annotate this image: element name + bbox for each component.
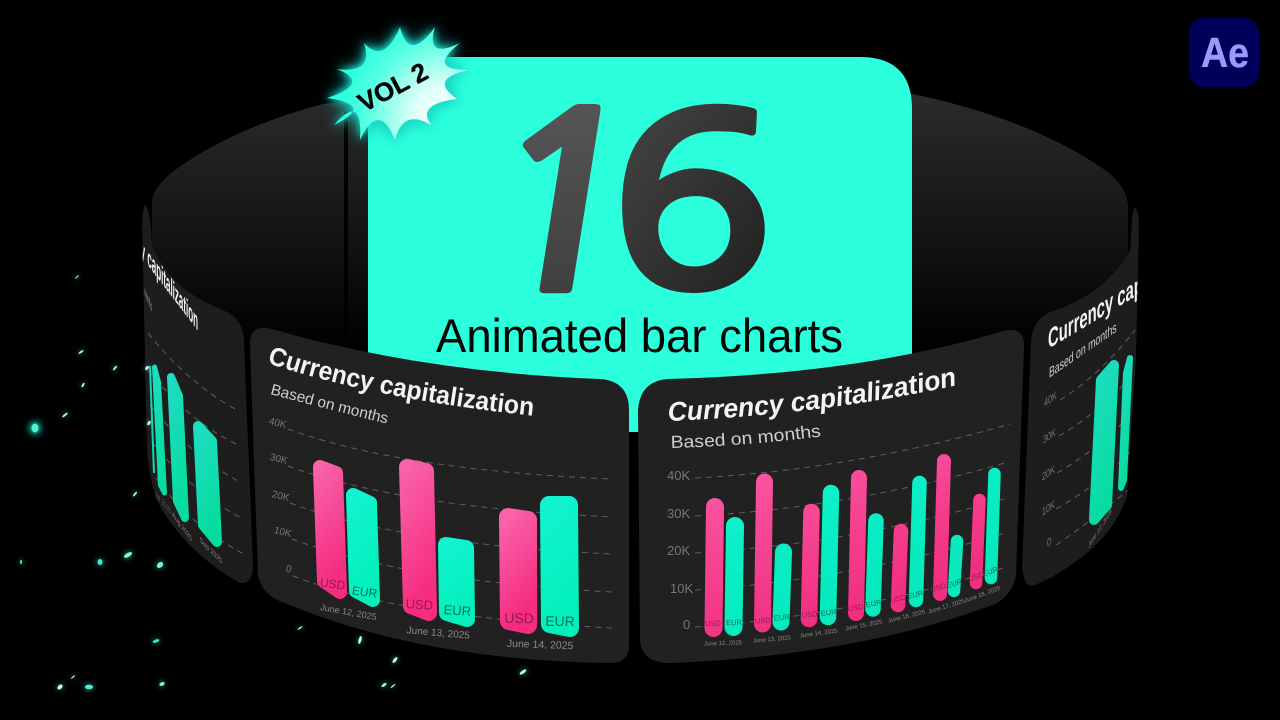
bars: June 14: USD xyxy=(504,610,534,626)
bar labels: EUR xyxy=(865,598,883,609)
date labels xyxy=(704,586,1002,648)
panel: far left chart: Jul 2025 xyxy=(155,488,171,517)
date labels: June 14, 2025 xyxy=(800,628,839,640)
bar labels: USD xyxy=(847,602,865,613)
panel: far right chart: Currency capitalization xyxy=(1048,226,1211,355)
gap between back panels xyxy=(344,112,348,332)
y axis labels: 20K xyxy=(271,489,291,504)
y axis labels: 30K xyxy=(269,452,289,467)
panel: far right chart: 30K xyxy=(1043,426,1056,447)
panel: far right chart: 20K xyxy=(1042,463,1055,484)
bars: June 14: June 14, 2025 xyxy=(507,638,574,652)
panel: far right chart: June 12, 2025 xyxy=(1089,506,1111,551)
card background xyxy=(638,330,1024,663)
panel: far left chart: Currency capitalization xyxy=(110,194,198,337)
date labels: June 12, 2025 xyxy=(704,640,743,648)
y axis labels: 0 xyxy=(683,617,690,632)
bar labels: USD xyxy=(967,570,986,583)
bar labels: USD xyxy=(929,581,948,594)
panel: chart with seven date groups xyxy=(638,330,1024,663)
big number 16: 6 xyxy=(606,88,777,326)
bars: June 12: EUR xyxy=(351,583,378,601)
panel: far right chart: Based on months xyxy=(1049,319,1117,381)
date labels: June 16, 2025 xyxy=(888,609,927,625)
y axis labels: 0 xyxy=(285,564,293,576)
bars: June 13: EUR xyxy=(443,602,472,619)
bars: June 13: June 13, 2025 xyxy=(406,625,471,642)
panel: far left chart: Based on months xyxy=(134,261,152,316)
bar labels: USD xyxy=(755,615,772,626)
subtitle: Animated bar charts: Animated bar charts xyxy=(436,309,843,362)
bars xyxy=(714,461,994,628)
bar labels: USD xyxy=(890,592,908,605)
bars: June 12 xyxy=(319,467,378,622)
bar labels: EUR xyxy=(907,588,925,601)
date labels: June 13, 2025 xyxy=(753,635,792,645)
y axis labels xyxy=(268,416,293,576)
badge starburst xyxy=(327,27,468,140)
panel: far right chart xyxy=(1022,207,1139,586)
y axis labels: 10K xyxy=(670,581,693,596)
badge label: VOL 2 xyxy=(353,56,433,118)
bar labels: EUR xyxy=(981,565,1000,579)
panel: far right chart: 0 xyxy=(1047,535,1051,550)
icon: After Effects: Ae xyxy=(1201,29,1249,76)
panel: far left chart: Sep 2025 xyxy=(200,535,222,566)
chart subtitle: Based on months xyxy=(271,384,388,423)
bar labels: EUR xyxy=(726,618,743,627)
bar labels: USD xyxy=(705,619,722,628)
bars: June 13 xyxy=(405,467,472,642)
dark cylinder back wall xyxy=(152,70,1128,350)
bars: June 14 xyxy=(504,505,575,652)
panel: chart with three date groups xyxy=(250,328,629,663)
particles xyxy=(20,275,527,690)
badge: VOL 2 xyxy=(327,27,468,140)
icon: After Effects xyxy=(1189,18,1259,87)
chart subtitle: Based on months xyxy=(672,426,820,448)
bars: June 14: EUR xyxy=(545,613,575,629)
date labels: June 17, 2025 xyxy=(928,598,966,615)
big number 16: 1 xyxy=(460,86,665,328)
panel: far left chart xyxy=(142,205,253,583)
y axis labels: 20K xyxy=(667,543,690,558)
date labels: June 15, 2025 xyxy=(845,619,884,633)
y axis labels xyxy=(667,468,693,632)
bar labels: USD xyxy=(801,609,819,620)
y axis labels: 40K xyxy=(667,468,690,483)
panel: far right chart: 40K xyxy=(1044,389,1057,410)
big number 16 xyxy=(460,86,777,328)
main cyan card xyxy=(368,57,912,432)
card background xyxy=(250,328,629,663)
chart title: Currency capitalization xyxy=(270,348,533,416)
gridlines xyxy=(288,429,612,628)
date labels: June 18, 2025 xyxy=(964,586,1002,604)
panel: far left chart: Aug 2025 xyxy=(172,509,192,544)
bar labels: EUR xyxy=(945,577,964,590)
panel: far right chart: 10K xyxy=(1042,498,1055,519)
bars: June 12: USD xyxy=(319,575,346,593)
bars: June 12: June 12, 2025 xyxy=(320,602,377,622)
chart title: Currency capitalization xyxy=(669,372,954,421)
y axis labels: 10K xyxy=(273,525,293,540)
bars: June 13: USD xyxy=(405,596,434,613)
y axis labels: 30K xyxy=(667,506,690,521)
gridlines xyxy=(695,424,1010,627)
bar labels: EUR xyxy=(773,612,791,623)
bar labels xyxy=(705,565,1000,628)
bar labels: EUR xyxy=(820,607,838,618)
y axis labels: 40K xyxy=(268,416,288,431)
